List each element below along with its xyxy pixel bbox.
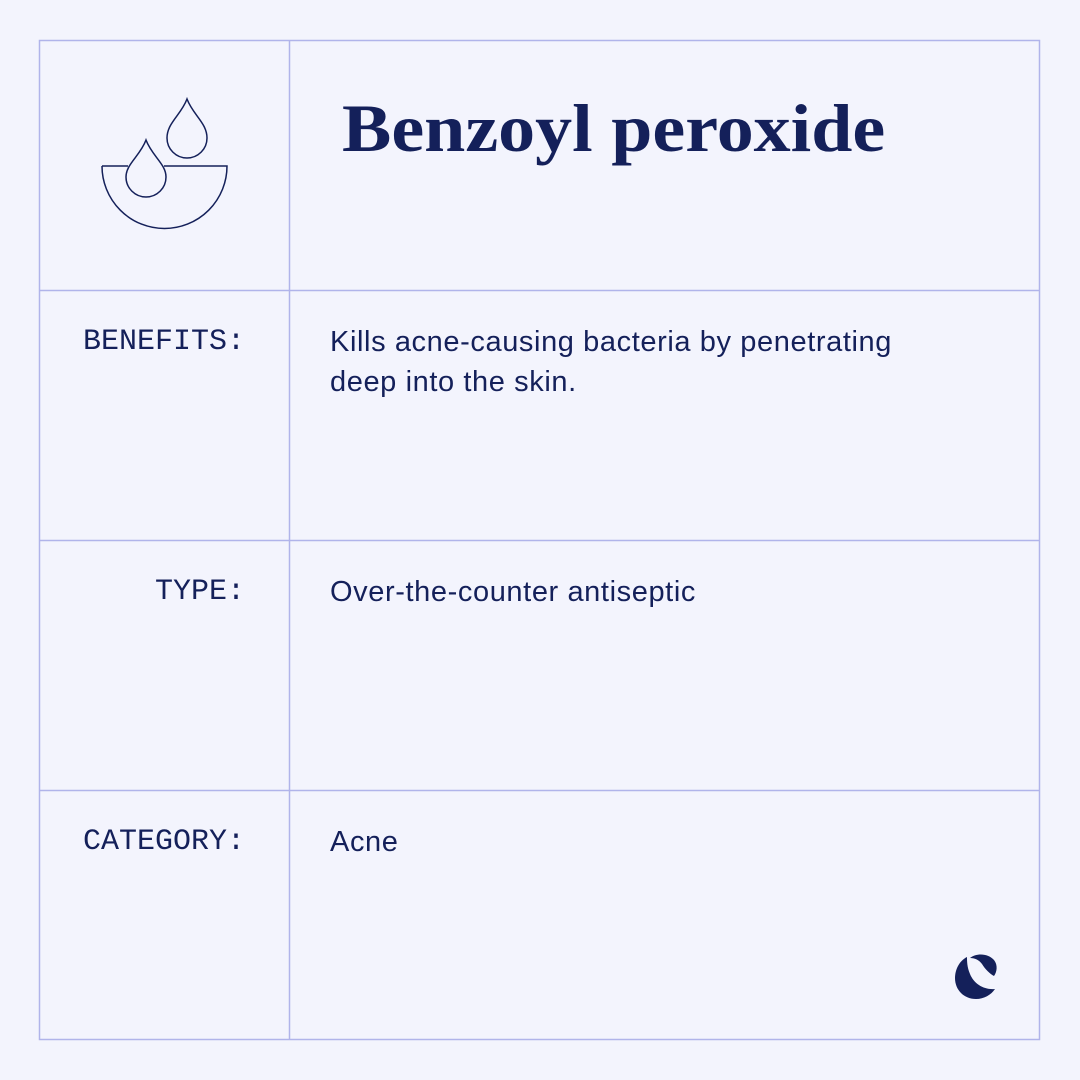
icon: drops over bowl [101,97,228,230]
label: benefits: BENEFITS: [83,325,245,359]
text: benefits [330,326,892,398]
title: Benzoyl peroxide [342,90,885,166]
label: category: CATEGORY: [83,825,245,859]
text: benefits: Kills acne-causing bacteria by penetrating [330,326,892,358]
text: benefits: deep into the skin. [330,366,577,398]
logo [955,954,997,999]
label: type: TYPE: [155,575,245,609]
text: category: Acne [330,826,398,858]
text: type: Over-the-counter antiseptic [330,576,696,608]
